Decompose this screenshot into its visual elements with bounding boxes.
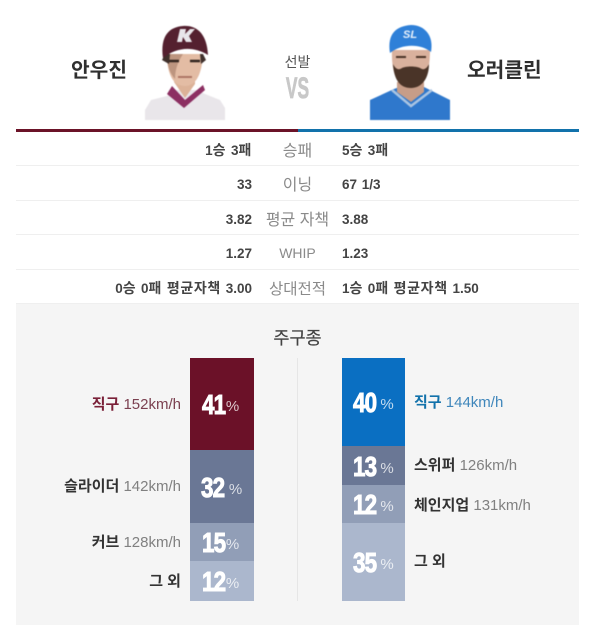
segment: fastball 40%: % <box>380 396 394 413</box>
panel heading: 주구종 <box>273 328 322 348</box>
stacked bar: right pitcher <box>342 358 405 601</box>
label: right sweeper: 스위퍼 126km/h <box>414 457 517 474</box>
label: right other: 그 외 <box>414 553 446 570</box>
row: head to head <box>115 280 479 298</box>
portrait: right pitcher: SL <box>403 29 417 41</box>
segment: other 12% <box>190 561 254 601</box>
label: left other: 그 외 <box>149 573 181 590</box>
row: innings: 33 <box>237 177 252 192</box>
label: left curve: 커브 128km/h <box>92 534 181 551</box>
segment: other 12%: 12 <box>202 566 226 597</box>
segment: curve 15%: 15 <box>202 527 226 558</box>
row: head to head: 1승 0패 평균자책 1.50 <box>342 280 479 296</box>
player name: left: 안우진 <box>71 60 127 82</box>
row: head to head: 0승 0패 평균자책 3.00 <box>115 280 252 296</box>
segment: slider 32%: 32 <box>201 472 225 503</box>
row: innings: 이닝 <box>283 177 312 194</box>
segment: fastball 41%: 41 <box>202 389 226 420</box>
stacked bar: left pitcher <box>190 358 254 601</box>
portrait: left pitcher <box>145 25 225 120</box>
row: wins and losses: 5승 3패 <box>342 142 389 158</box>
portrait: right pitcher <box>369 24 451 121</box>
row: ERA: 평균 자책 <box>266 212 329 229</box>
segment: other 12%: % <box>226 575 239 592</box>
stats table <box>16 142 579 304</box>
row: WHIP <box>226 245 368 261</box>
row: WHIP: 1.23 <box>342 246 368 261</box>
row: head to head: 상대전적 <box>269 281 326 298</box>
segment: curve 15% <box>190 523 254 561</box>
header divider: right team colour <box>298 129 579 132</box>
row: innings <box>237 176 381 194</box>
segment: other 35%: % <box>380 556 394 573</box>
label: left slider: 슬라이더 142km/h <box>64 478 181 495</box>
row: WHIP: 1.27 <box>226 246 252 261</box>
segment: slider 32% <box>190 450 254 523</box>
segment: sweeper 13% <box>342 446 405 485</box>
centre divider <box>297 358 298 601</box>
segment: sweeper 13%: % <box>380 460 394 477</box>
segment: fastball 40% <box>342 358 405 446</box>
player name: right: 오러클린 <box>467 60 542 82</box>
segment: changeup 12% <box>342 485 405 523</box>
panel: main pitches <box>16 304 579 625</box>
starter label: 선발 <box>285 54 310 70</box>
row: innings: 67 1/3 <box>342 177 381 192</box>
VS mark: VS <box>286 72 309 105</box>
header divider: left team colour <box>16 129 298 132</box>
row: ERA: 3.88 <box>342 212 368 227</box>
label: left fastball: 직구 152km/h <box>92 396 181 413</box>
segment: other 35% <box>342 523 405 601</box>
segment: changeup 12%: % <box>380 498 394 515</box>
segment: fastball 41% <box>190 358 254 450</box>
segment: curve 15%: % <box>226 536 239 553</box>
row: wins and losses: 1승 3패 <box>205 142 252 158</box>
segment: slider 32%: % <box>229 481 242 498</box>
label: right fastball: 직구 144km/h <box>414 394 503 411</box>
label: right changeup: 체인지업 131km/h <box>414 497 531 514</box>
segment: other 35%: 35 <box>353 547 376 578</box>
row: wins and losses: 승패 <box>283 143 312 160</box>
segment: fastball 40%: 40 <box>353 387 376 418</box>
row: WHIP: WHIP <box>279 245 316 261</box>
segment: changeup 12%: 12 <box>353 489 376 520</box>
row: ERA: 3.82 <box>226 212 252 227</box>
row: wins and losses <box>205 142 389 160</box>
segment: fastball 41%: % <box>226 398 239 415</box>
row: ERA <box>226 212 368 229</box>
segment: sweeper 13%: 13 <box>353 451 376 482</box>
